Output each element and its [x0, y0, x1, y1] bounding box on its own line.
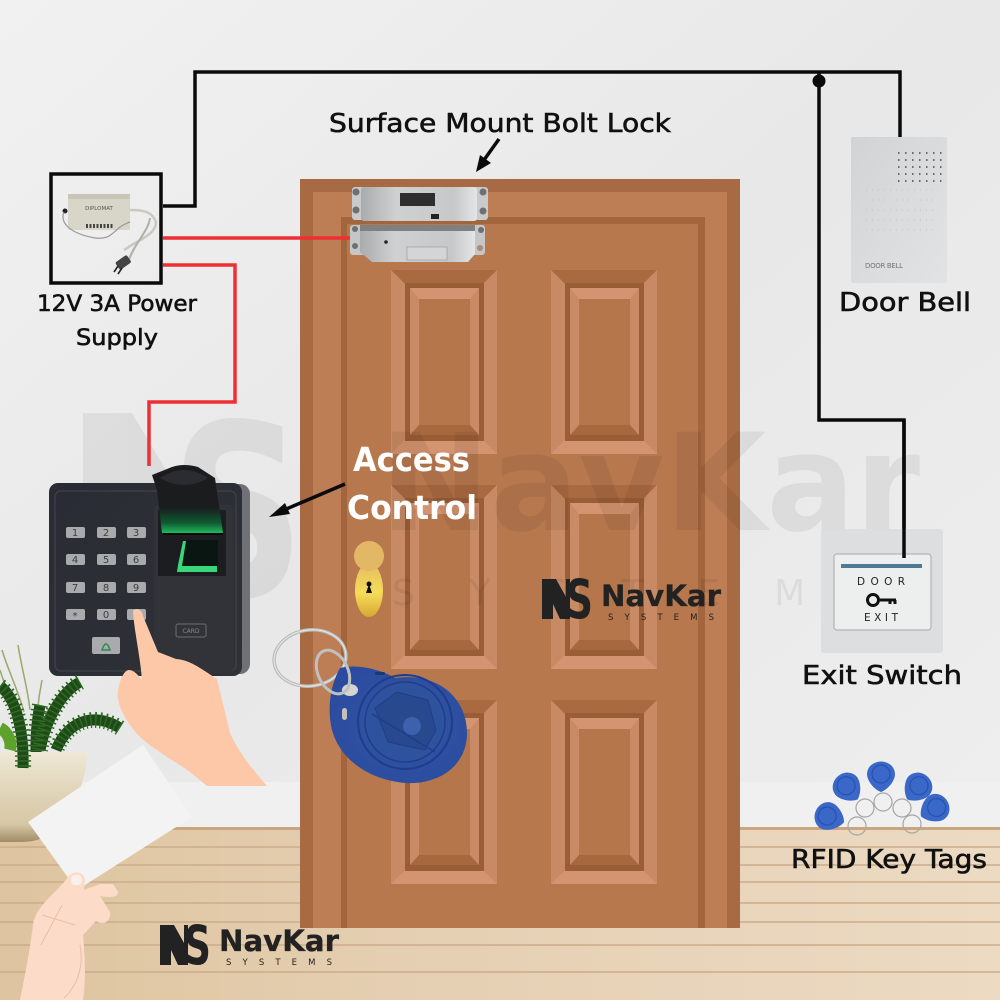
keypad: 5	[103, 555, 109, 566]
plant pot	[0, 752, 87, 842]
watermark: SYSTEMS	[392, 573, 882, 614]
red wire: power to lock	[163, 236, 350, 240]
tag rings	[848, 793, 921, 835]
plant	[0, 645, 120, 842]
black wire: branch to exit switch	[819, 72, 904, 558]
label: power supply: 12V 3A Power	[37, 292, 198, 317]
door	[300, 179, 740, 928]
keypad: 1	[72, 528, 78, 539]
surface mount bolt lock	[350, 187, 488, 262]
access control device	[49, 465, 250, 676]
keypad: 6	[133, 555, 139, 566]
door bell: DOOR BELL	[865, 262, 903, 270]
bottom logo: NavKar	[219, 924, 340, 958]
keypad: 8	[103, 583, 109, 594]
label: access control	[347, 440, 477, 527]
speaker holes	[898, 153, 944, 181]
RFID key tags	[811, 762, 954, 835]
keypad: 2	[103, 528, 109, 539]
power supply box	[51, 174, 161, 283]
bottom logo: SYSTEMS	[226, 958, 332, 968]
blank RFID card	[28, 745, 192, 890]
keypad	[66, 527, 146, 654]
thumb nail	[71, 875, 82, 885]
exit switch: EXIT	[864, 612, 899, 624]
black wire: power to bell	[163, 72, 900, 206]
scanner panel: CARD	[182, 628, 200, 635]
keypad: *	[72, 611, 78, 622]
door logo: S	[566, 568, 593, 631]
scanner panel	[152, 465, 233, 673]
door logo: NavKar	[601, 579, 722, 613]
leaves	[0, 645, 120, 768]
label: power supply: Supply	[76, 326, 158, 351]
keypad: 3	[133, 528, 139, 539]
icon: key	[868, 594, 896, 606]
door panels	[391, 270, 657, 884]
baseboard	[0, 782, 1000, 828]
door logo	[542, 568, 722, 631]
watermark: NavKar	[380, 405, 920, 562]
bottom logo: S	[184, 914, 211, 977]
door bell	[851, 137, 947, 283]
wiring	[149, 72, 904, 558]
lock upper part	[352, 187, 488, 221]
arrow: to access control	[269, 484, 345, 517]
watermark: S	[170, 373, 305, 653]
exit switch: DOOR	[857, 576, 905, 588]
label: RFID key tags: RFID Key Tags	[791, 845, 987, 875]
label: door bell: Door Bell	[839, 288, 971, 318]
watermark	[83, 373, 920, 653]
wooden floor	[0, 827, 1000, 1000]
keypad: 0	[103, 610, 109, 621]
hand holding card	[20, 872, 118, 1000]
keypad: 4	[72, 555, 78, 566]
label: bolt lock: Surface Mount Bolt Lock	[329, 109, 671, 139]
lock lower part	[350, 225, 485, 262]
arrow: to bolt lock	[476, 139, 499, 172]
keypad: 9	[133, 583, 139, 594]
keypad: 7	[72, 583, 78, 594]
exit switch	[821, 420, 943, 653]
wire junction	[812, 74, 826, 88]
bottom logo	[160, 914, 340, 977]
key ring	[270, 625, 350, 691]
label: access control: Control	[347, 488, 477, 527]
grass blades	[0, 645, 42, 740]
hand pressing keypad	[118, 609, 267, 786]
label: access control: Access	[353, 440, 470, 479]
red wire: power to reader	[149, 265, 235, 466]
label: exit switch: Exit Switch	[802, 661, 962, 691]
large blue key fob	[270, 625, 467, 783]
door knob and keyhole	[354, 541, 384, 617]
door logo: SYSTEMS	[608, 613, 714, 623]
frond	[0, 682, 120, 768]
power adapter: DIPLOMAT	[85, 206, 114, 212]
label: power supply	[37, 292, 198, 351]
